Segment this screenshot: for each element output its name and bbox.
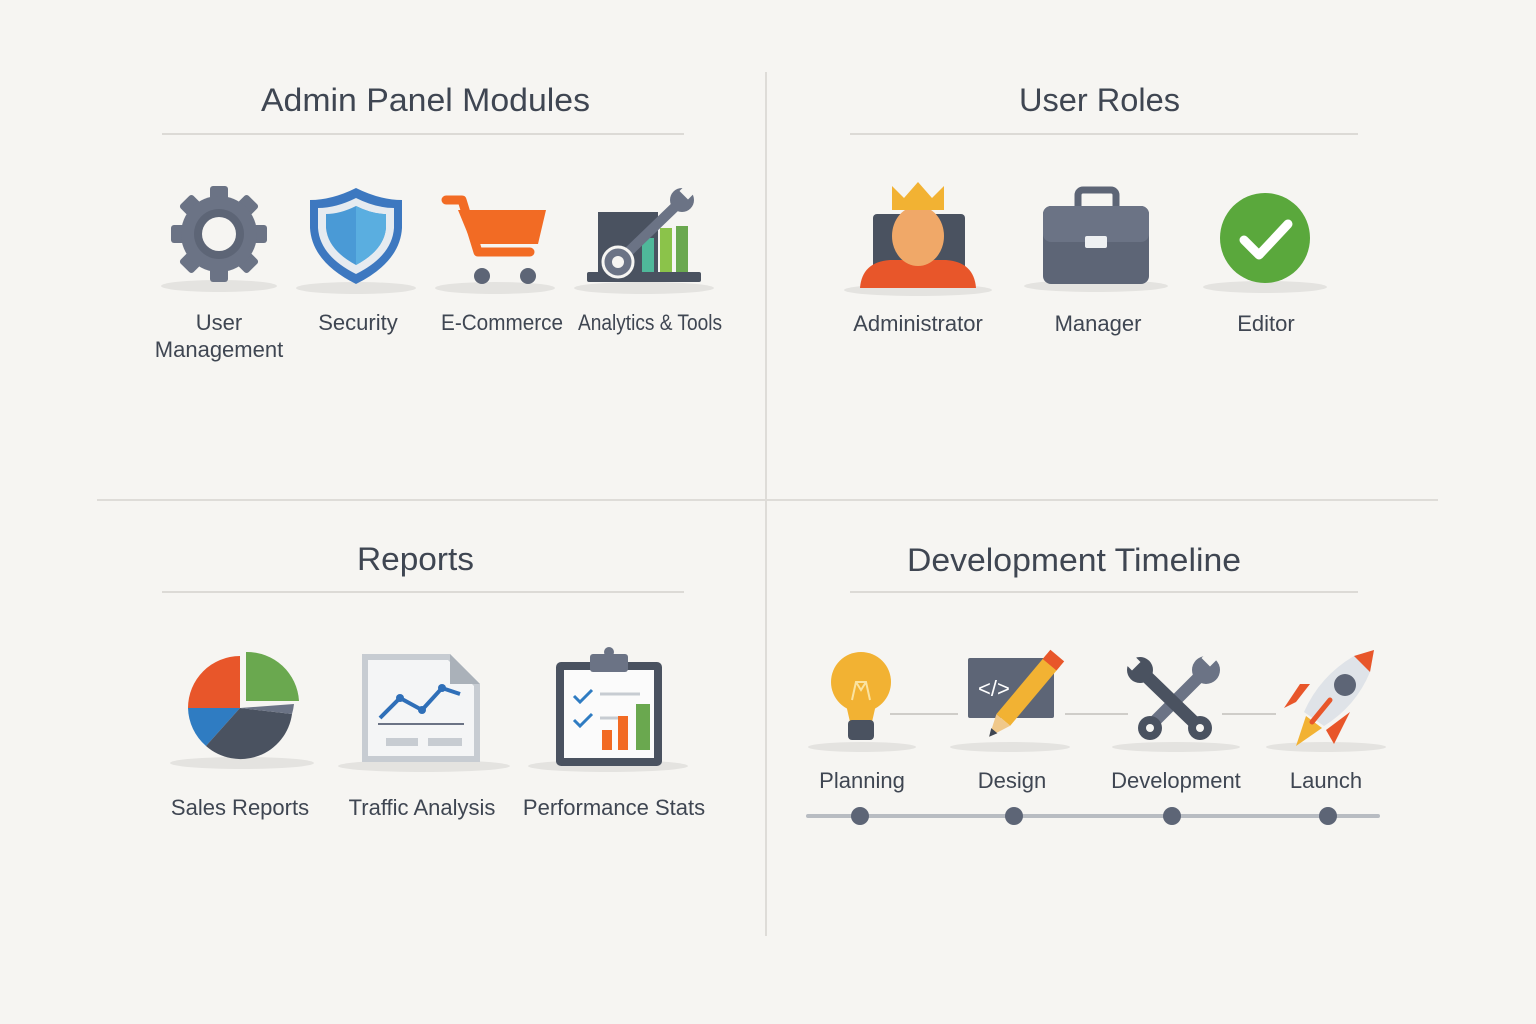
label: E-Commerce: E-Commerce [441, 310, 563, 335]
heading: Admin Panel Modules: Admin Panel Modules [261, 82, 590, 118]
label: Design: Design [978, 768, 1046, 793]
icon: analytics & tools [574, 183, 714, 294]
label: Sales Reports: Sales Reports [171, 795, 309, 820]
icon: crossed wrenches [1112, 650, 1240, 752]
heading: Development Timeline: Development Timeline [907, 542, 1241, 578]
icon: shield [296, 188, 416, 294]
icon: design code pencil [950, 650, 1070, 752]
label: Administrator: Administrator [853, 311, 983, 336]
label: Analytics & Tools: Analytics & Tools [578, 310, 722, 335]
icon: cart [435, 200, 555, 294]
panel: development timeline [808, 542, 1386, 825]
heading: User Roles: User Roles [1019, 82, 1180, 118]
panel: reports [162, 541, 705, 820]
label: Security: Security [318, 310, 398, 335]
label: Manager: Manager [1055, 311, 1141, 336]
icon: briefcase [1024, 190, 1168, 292]
label: Traffic Analysis: Traffic Analysis [349, 795, 495, 820]
panel: user roles [844, 82, 1358, 336]
icon: performance clipboard [528, 647, 688, 772]
heading: Reports: Reports [357, 541, 474, 577]
panel: admin panel modules: Management [155, 337, 283, 362]
icon: lightbulb [808, 652, 916, 752]
icon: pie chart [170, 652, 314, 769]
icon: traffic analysis document [338, 654, 510, 772]
icon: design code pencil: </> [978, 676, 1010, 701]
icon: administrator [844, 182, 992, 296]
label: Performance Stats: Performance Stats [523, 795, 705, 820]
label: Development: Development [1111, 768, 1241, 793]
timeline axis [808, 807, 1378, 825]
label: Editor: Editor [1237, 311, 1295, 336]
panel: admin panel modules [155, 82, 722, 362]
label: User Management: User [196, 310, 242, 335]
icon: rocket [1266, 650, 1386, 752]
label: Planning: Planning [819, 768, 905, 793]
label: Launch: Launch [1290, 768, 1362, 793]
icon: editor check [1203, 193, 1327, 293]
icon: gear [161, 186, 277, 292]
